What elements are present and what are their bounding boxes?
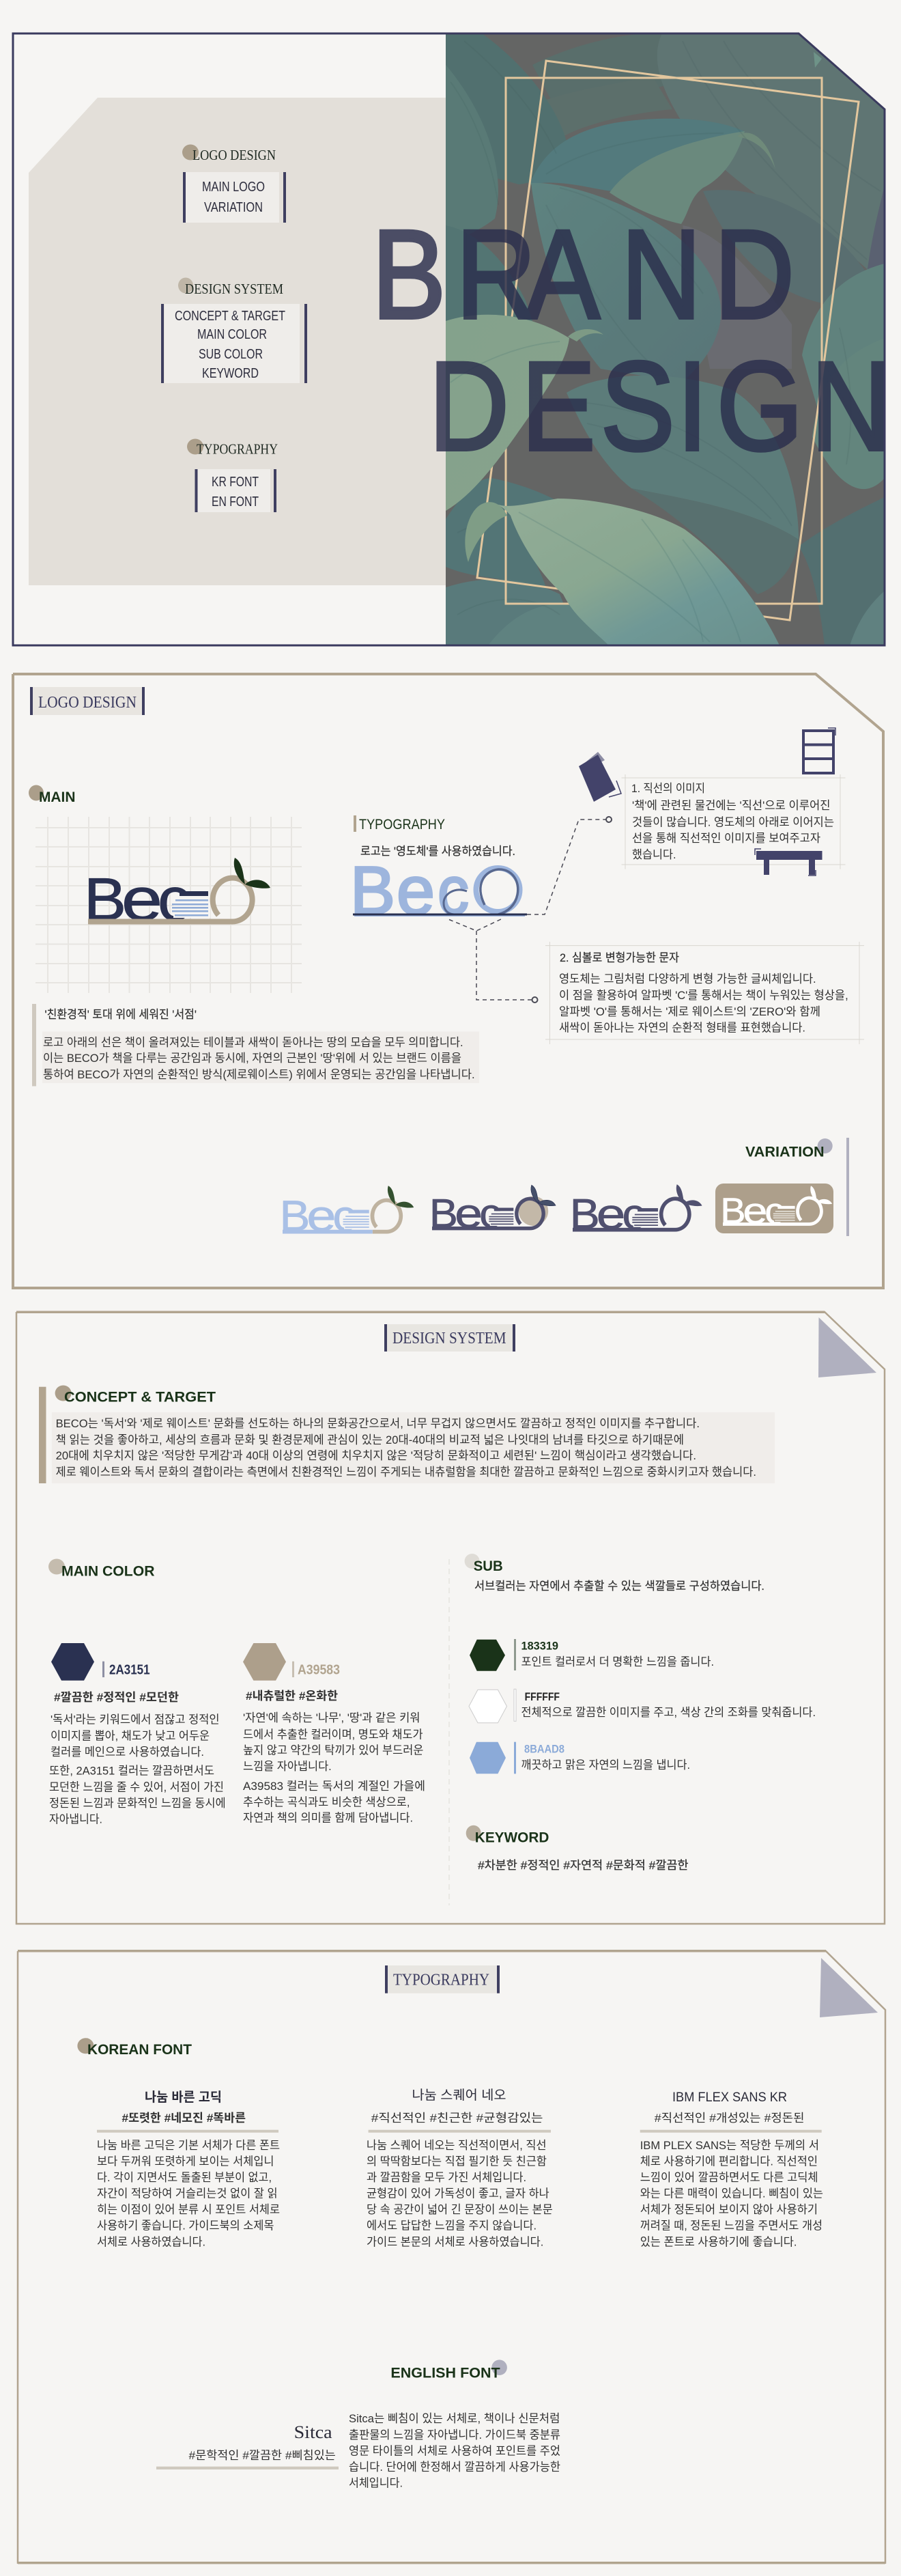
logo variation: blue and tan: e xyxy=(306,1192,336,1240)
arrow: connector to symbol note xyxy=(449,919,538,1003)
column: nanum square neo xyxy=(367,2088,553,2248)
column: ibm plex sans kr: 와는 다른 매력이 있습니다. 삐침이 있는 xyxy=(640,2187,823,2200)
swatch: 2A3151 xyxy=(51,1643,179,1704)
logo: main beco xyxy=(84,858,270,933)
callout: transformable letters: 새싹이 돋아나는 자연의 순환적 형태를 표현했습니다. xyxy=(559,1022,805,1035)
swatch: 183319: 포인트 컬러로서 더 명확한 느낌을 줍니다. xyxy=(521,1655,714,1668)
beige contents background xyxy=(29,98,446,585)
contents: typography: TYPOGRAPHY xyxy=(197,441,278,458)
text block: sitca description: 영문 타이틀의 서체로 사용하여 포인트를 주었 xyxy=(349,2444,560,2457)
font sample: sitca xyxy=(156,2422,339,2469)
text block: concept and target: BECO는 '독서'와 '제로 웨이스트' 문화를 선도하는 하나의 문화공간으로서, 너무 무겁지 않으면서도 깔끔하고 정적인 이미지를 추구합니다. xyxy=(56,1417,700,1430)
swatch: 183319 xyxy=(470,1639,714,1671)
swatch: FFFFFF xyxy=(469,1689,816,1723)
swatch: A39583: #내츄럴한 #온화한 xyxy=(246,1690,338,1703)
column: ibm plex sans kr: 있는 폰트로 사용하기에 좋습니다. xyxy=(640,2235,797,2248)
swatch: 8BAAD8: 깨끗하고 맑은 자연의 느낌을 냅니다. xyxy=(521,1759,690,1772)
icon: book xyxy=(579,752,621,802)
heading: sub color xyxy=(465,1554,764,1593)
callout: transformable letters: 2. 심볼로 변형가능한 문자 xyxy=(560,951,679,964)
callout: straight line image xyxy=(621,774,845,869)
contents: design system xyxy=(161,277,307,383)
column: nanum square neo: 과 깔끔함을 모두 가진 서체입니다. xyxy=(367,2171,526,2184)
logo variation: blue and tan: B xyxy=(280,1192,310,1240)
text block: concept and target: 책 읽는 것을 좋아하고, 세상의 흐름과 문화 및 환경문제에 관심이 있는 20대-40대의 비교적 넓은 나잇대의 남녀를 타깃으로 하기때문에 xyxy=(56,1433,684,1446)
contents: design system: KEYWORD xyxy=(202,366,259,381)
column: nanum square neo: 당 속 공간이 넓어 긴 문장이 쓰이는 본문 xyxy=(367,2203,553,2216)
text block: logo meaning: 이는 BECO가 책을 다루는 공간임과 동시에, 자연의 근본인 '땅'위에 서 있는 브랜드 이름을 xyxy=(43,1052,461,1065)
swatch: FFFFFF: 전체적으로 깔끔한 이미지를 주고, 색상 간의 조화를 맞춰줍니다. xyxy=(521,1706,816,1719)
logo variation: white on tan: c xyxy=(764,1191,784,1231)
panel: cover xyxy=(13,33,891,645)
heading: logo design: LOGO DESIGN xyxy=(38,694,137,712)
text block: logo meaning: 로고 아래의 선은 책이 올려져있는 테이블과 새싹이 돋아나는 땅의 모습을 모두 의미합니다. xyxy=(43,1036,463,1049)
callout: transformable letters: 알파벳 'O'를 통해서는 '제로 웨이스트'의 'ZERO'와 함께 xyxy=(559,1005,820,1018)
heading: variation: VARIATION xyxy=(745,1145,825,1160)
heading: main: MAIN xyxy=(39,789,75,805)
title: brand design: BRAND xyxy=(372,204,795,345)
text block: sitca description: Sitca는 삐침이 있는 서체로, 책이나 신문처럼 xyxy=(349,2412,560,2425)
column: nanum barun gothic: 서체로 사용하였습니다. xyxy=(97,2235,205,2248)
swatch: A39583: A39583 xyxy=(298,1663,340,1678)
column: nanum barun gothic: 나눔 바른 고딕 xyxy=(145,2090,222,2105)
logo variation: navy xyxy=(570,1184,702,1238)
contents: design system: SUB COLOR xyxy=(199,347,263,362)
text block: 2A3151 description: 이미지를 뽑아, 채도가 낮고 어두운 xyxy=(51,1730,210,1743)
column: nanum barun gothic: 나눔 바른 고딕은 기본 서체가 다른 폰트 xyxy=(97,2139,280,2152)
logo variation: navy with tan circle: e xyxy=(455,1190,483,1236)
column: ibm plex sans kr: 체로 사용하기에 편리합니다. 직선적인 xyxy=(640,2155,818,2168)
contents: design system: DESIGN SYSTEM xyxy=(185,281,283,297)
column: nanum barun gothic: 사용하기 좋습니다. 가이드북의 소제목 xyxy=(97,2220,274,2232)
swatch: FFFFFF: FFFFFF xyxy=(525,1690,560,1703)
text block: A39583 description: 느낌을 자아냅니다. xyxy=(243,1760,332,1773)
logo variation: blue and tan xyxy=(280,1186,414,1240)
column: nanum barun gothic: 자간이 적당하여 거슬리는것 없이 잘 읽 xyxy=(97,2187,278,2200)
arrow: connector to straight-line note xyxy=(527,817,612,914)
text block: 2A3151 description: '독서'라는 키워드에서 점잖고 정적인 xyxy=(51,1713,220,1726)
column: ibm plex sans kr: 느낌이 있어 깔끔하면서도 다른 고딕체 xyxy=(640,2171,818,2184)
contents: logo design: MAIN LOGO xyxy=(202,180,265,195)
column: ibm plex sans kr: IBM PLEX SANS는 적당한 두께의 서 xyxy=(640,2139,819,2152)
callout: straight line image: 것들이 많습니다. 영도체의 아래로 이어지는 xyxy=(632,815,834,829)
heading: main color: MAIN COLOR xyxy=(61,1564,154,1580)
logo variation: navy: c xyxy=(622,1190,646,1238)
logo variation: navy with tan circle: B xyxy=(429,1190,458,1236)
title: brand design xyxy=(380,229,883,453)
column: nanum barun gothic: 다. 각이 지면서도 돌출된 부분이 없고, xyxy=(97,2171,272,2184)
text block: A39583 description xyxy=(243,1711,425,1825)
panel: typography xyxy=(18,1950,885,2564)
logo: main beco: c xyxy=(158,865,190,933)
column: ibm plex sans kr: 서체가 정돈되어 보이지 않아 사용하기 xyxy=(640,2203,818,2216)
swatch: 2A3151: 2A3151 xyxy=(109,1663,150,1678)
callout: straight line image: 선을 통해 직선적인 이미지를 보여주고자 xyxy=(632,832,820,845)
icon: folded corner xyxy=(820,1958,878,2017)
logo variation: blue and tan: c xyxy=(332,1192,356,1240)
heading: korean font: KOREAN FONT xyxy=(87,2042,192,2058)
text block: 2A3151 description: 또한, 2A3151 컬러는 깔끔하면서도 xyxy=(49,1765,214,1778)
contents: typography xyxy=(187,438,278,512)
text block: logo meaning xyxy=(32,1004,479,1086)
callout: transformable letters xyxy=(545,942,864,1044)
text block: concept and target: 20대에 치우치지 않은 '적당한 무게감'과 40대 이상의 연령에 치우치지 않은 '적당히 문화적이고 세련된' 느낌이 핵심이라고 생각했습니다. xyxy=(56,1449,696,1462)
text block: A39583 description: '자연'에 속하는 '나무', '땅'과 같은 키워 xyxy=(243,1711,420,1724)
column: nanum square neo: 나눔 스퀘어 네오는 직선적이면서, 직선 xyxy=(367,2139,546,2152)
text block: logo meaning: '친환경적' 토대 위에 세워진 '서점' xyxy=(45,1008,197,1021)
icon: folded corner xyxy=(818,1317,876,1377)
swatch: 8BAAD8 xyxy=(470,1742,690,1774)
swatch: 183319: 183319 xyxy=(521,1640,558,1653)
botanical leaf photo xyxy=(446,33,885,645)
gold frames xyxy=(477,61,859,620)
swatch: 8BAAD8: 8BAAD8 xyxy=(524,1743,564,1756)
text block: sitca description: 서체입니다. xyxy=(349,2477,403,2490)
text block: A39583 description: 자연과 책의 의미를 함께 담아냅니다. xyxy=(243,1812,413,1825)
heading: english font xyxy=(390,2360,507,2381)
text block: 2A3151 description: 정돈된 느낌과 문화적인 느낌을 동시에 xyxy=(49,1797,226,1810)
text block: A39583 description: A39583 컬러는 독서의 계절인 가을에 xyxy=(243,1780,425,1793)
logo variation: navy: B xyxy=(570,1190,600,1238)
column: nanum barun gothic: 보다 두꺼워 또렷하게 보이는 서체입니 xyxy=(97,2155,274,2168)
column: nanum square neo: 가이드 본문의 서체로 사용하였습니다. xyxy=(367,2235,543,2248)
contents: logo design xyxy=(182,145,286,223)
callout: straight line image: 했습니다. xyxy=(632,848,676,861)
panel: design system xyxy=(16,1311,885,1924)
heading: typography: TYPOGRAPHY xyxy=(393,1972,489,1989)
logo variation: white on tan: e xyxy=(743,1191,767,1231)
logo: main beco: B xyxy=(84,865,126,933)
text block: concept and target: 제로 웨이스트와 독서 문화의 결합이라는 측면에서 친환경적인 느낌이 주게되는 내츄럴함을 최대한 깔끔하고 문화적인 느낌으로 중화시키고자 했습니다. xyxy=(56,1466,756,1479)
contents: logo design: LOGO DESIGN xyxy=(192,147,276,163)
logo variation: white on tan: B xyxy=(720,1191,746,1231)
contents: typography: EN FONT xyxy=(212,494,259,509)
column: ibm plex sans kr: IBM FLEX SANS KR xyxy=(672,2090,787,2105)
contents: design system: CONCEPT & TARGET xyxy=(175,309,285,324)
logo: typography beco: B xyxy=(350,852,395,928)
logo: typography beco xyxy=(350,852,527,928)
column: ibm plex sans kr xyxy=(640,2090,823,2248)
column: ibm plex sans kr: 꺼려질 때, 정돈된 느낌을 주면서도 개성 xyxy=(640,2220,823,2232)
column: nanum barun gothic: #또렷한 #네모진 #똑바른 xyxy=(121,2112,246,2125)
column: nanum square neo: 균형감이 있어 가독성이 좋고, 글자 하나 xyxy=(367,2187,549,2200)
logo: typography beco: e xyxy=(397,852,435,928)
column: nanum square neo: 나눔 스퀘어 네오 xyxy=(412,2088,506,2103)
heading: typography xyxy=(385,1965,500,1993)
column: nanum barun gothic: 히는 이점이 있어 분류 시 포인트 서체로 xyxy=(97,2203,280,2216)
heading: sub color: SUB xyxy=(474,1558,503,1574)
logo variation: navy with tan circle: c xyxy=(479,1190,502,1236)
text block: 2A3151 description: 모던한 느낌을 줄 수 있어, 서점이 가진 xyxy=(49,1781,224,1794)
heading: logo design xyxy=(30,687,145,715)
swatch: 2A3151: #깔끔한 #정적인 #모던한 xyxy=(54,1691,179,1704)
text block: A39583 description: 드에서 추출한 컬러이며, 명도와 채도가 xyxy=(243,1728,423,1741)
text block: logo meaning: 통하여 BECO가 자연의 순환적인 방식(제로웨이스트) 위에서 운영되는 공간임을 나타냅니다. xyxy=(43,1068,475,1081)
text block: concept and target xyxy=(39,1385,775,1483)
column: nanum square neo: 의 딱딱함보다는 직접 필기한 듯 친근함 xyxy=(367,2155,547,2168)
heading: design system: DESIGN SYSTEM xyxy=(392,1330,506,1347)
heading: english font: ENGLISH FONT xyxy=(390,2366,500,2381)
logo variation: navy: e xyxy=(597,1190,625,1238)
contents: logo design: VARIATION xyxy=(204,200,263,215)
text block: A39583 description: 높지 않고 약간의 탁끼가 있어 부드러운 xyxy=(243,1744,423,1757)
heading: sub color: 서브컬러는 자연에서 추출할 수 있는 색깔들로 구성하였습니다. xyxy=(474,1580,764,1593)
text block: 2A3151 description: 컬러를 메인으로 사용하였습니다. xyxy=(51,1746,204,1759)
callout: transformable letters: 영도체는 그림처럼 다양하게 변형 가능한 글씨체입니다. xyxy=(559,972,816,985)
heading: main color xyxy=(48,1558,154,1580)
heading: keyword: KEYWORD xyxy=(475,1830,549,1846)
column: nanum barun gothic xyxy=(97,2090,280,2248)
text block: sitca description xyxy=(349,2412,560,2490)
callout: straight line image: '책'에 관련된 물건에는 '직선'으로 이루어진 xyxy=(632,799,830,812)
column: nanum square neo: 에서도 답답한 느낌을 주지 않습니다. xyxy=(367,2220,537,2232)
logo variation: white on tan xyxy=(715,1184,833,1233)
text block: sitca description: 습니다. 단어에 한정해서 깔끔하게 사용가능한 xyxy=(349,2461,560,2474)
text: keyword tags: #차분한 #정적인 #자연적 #문화적 #깔끔한 xyxy=(478,1859,689,1872)
text block: 2A3151 description: 자아냅니다. xyxy=(49,1812,102,1825)
font sample: sitca: Sitca xyxy=(294,2422,332,2442)
text block: sitca description: 출판물의 느낌을 자아냅니다. 가이드북 중분류 xyxy=(349,2428,560,2441)
logo: main beco: e xyxy=(121,865,162,933)
column: nanum square neo: #직선적인 #친근한 #균형감있는 xyxy=(371,2112,543,2125)
swatch: A39583 xyxy=(243,1643,340,1703)
text block: A39583 description: 추수하는 곡식과도 비슷한 색상으로, xyxy=(243,1795,410,1808)
contents: design system: MAIN COLOR xyxy=(197,327,267,342)
icon: bookshelf xyxy=(803,728,835,773)
text block: 2A3151 description xyxy=(49,1713,226,1825)
logo: typography beco: c xyxy=(438,852,469,928)
callout: straight line image: 1. 직선의 이미지 xyxy=(631,782,705,795)
foreground light leaves xyxy=(446,315,569,511)
heading: design system xyxy=(384,1324,515,1352)
icon: table xyxy=(755,849,822,876)
text: typeface note: 로고는 '영도체'를 사용하였습니다. xyxy=(360,845,515,858)
heading: main xyxy=(29,785,75,805)
heading: keyword xyxy=(466,1825,549,1846)
panel: logo design xyxy=(13,674,883,1288)
leaf veins xyxy=(450,41,881,615)
logo construction grid xyxy=(35,817,302,993)
title: brand design: DESIGN xyxy=(429,335,891,477)
heading: variation xyxy=(745,1138,849,1236)
text block: concept and target: CONCEPT & TARGET xyxy=(64,1390,216,1405)
outer frame xyxy=(13,33,885,645)
callout: transformable letters: 이 점을 활용하여 알파벳 'C'를 통해서는 책이 누워있는 형상을, xyxy=(559,989,848,1002)
font sample: sitca: #문학적인 #깔끔한 #삐침있는 xyxy=(188,2449,336,2462)
contents: typography: KR FONT xyxy=(212,475,259,490)
logo variation: navy with tan circle xyxy=(429,1185,556,1236)
column: ibm plex sans kr: #직선적인 #개성있는 #정돈된 xyxy=(655,2112,804,2125)
heading: typography: TYPOGRAPHY xyxy=(359,817,445,832)
